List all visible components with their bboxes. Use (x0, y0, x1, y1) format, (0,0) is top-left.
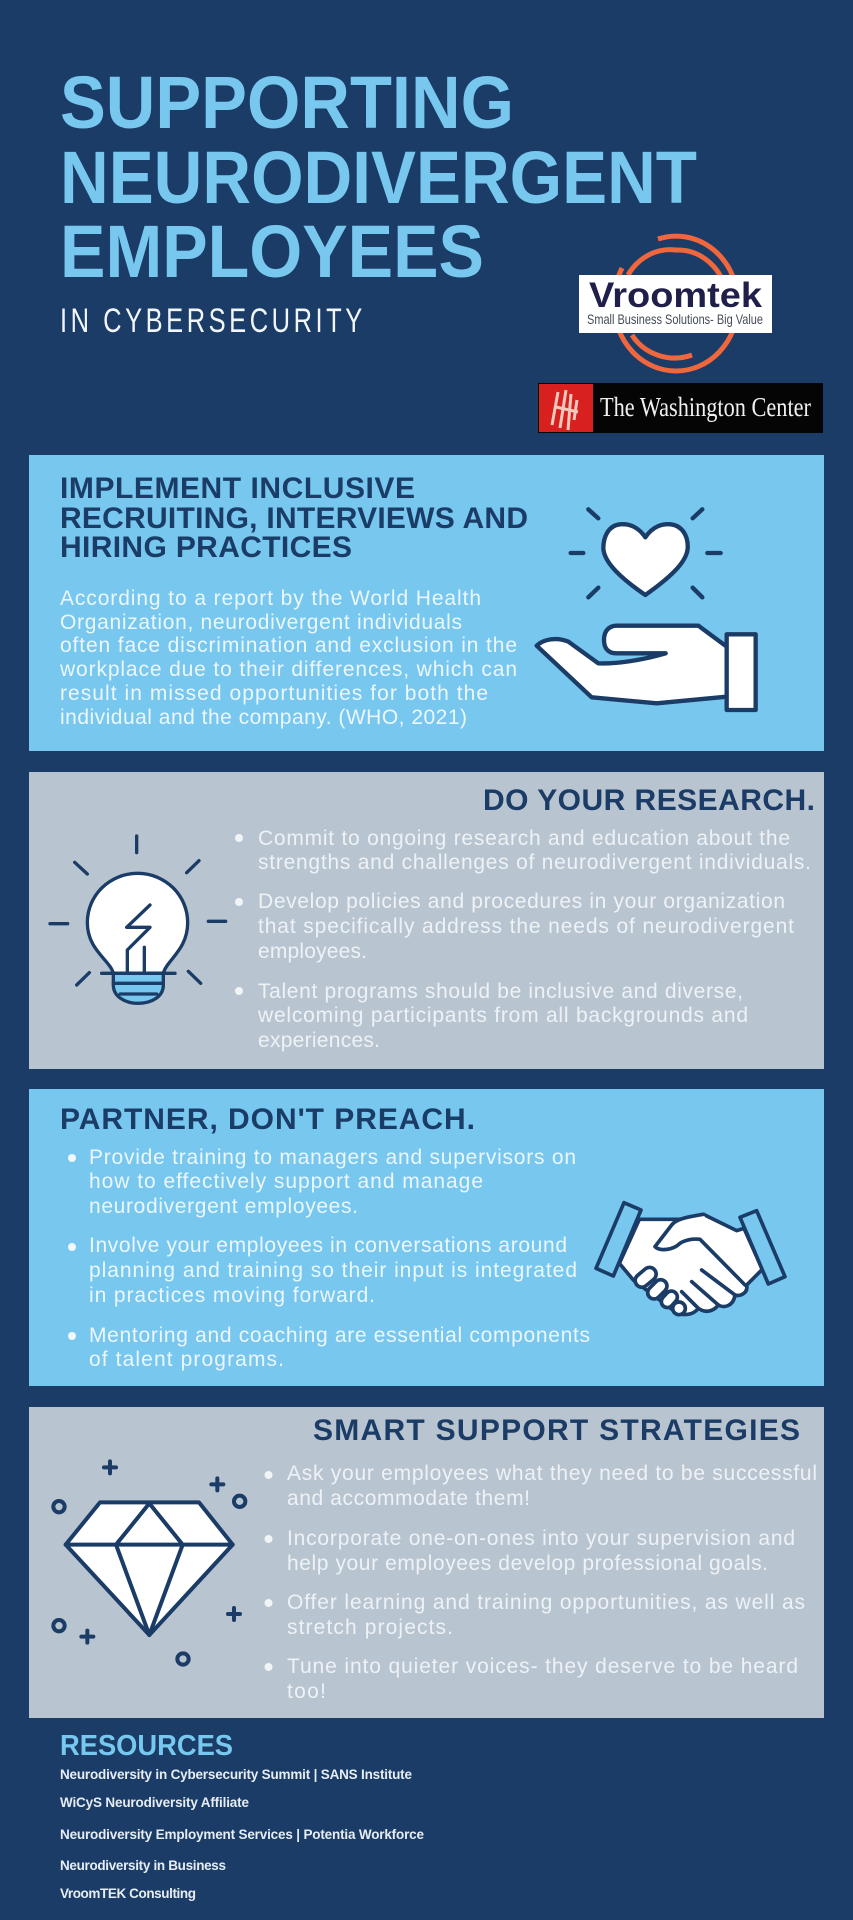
bullet list: partner: Mentoring and coaching are essential components (89, 1324, 590, 1347)
resources links: WiCyS Neurodiversity Affiliate (60, 1795, 249, 1810)
bullet list: partner: Involve your employees in conversations around (89, 1234, 567, 1257)
icon: light bulb (50, 836, 226, 1003)
bullet list: strategies: Incorporate one-on-ones into your supervision and (287, 1527, 795, 1550)
resources links: VroomTEK Consulting (60, 1886, 196, 1901)
bullet list: partner: in practices moving forward. (89, 1284, 375, 1307)
bullet list: partner: neurodivergent employees. (89, 1195, 358, 1218)
bullet list: research: Develop policies and procedures in your organization (258, 890, 785, 913)
bullet list: research: employees. (258, 940, 367, 963)
title line 3: EMPLOYEES (60, 210, 484, 293)
bullet list: strategies: Tune into quieter voices- they deserve to be heard (287, 1655, 798, 1678)
logo: Vroomtek (579, 236, 772, 371)
body text: WHO report (59, 587, 517, 729)
bullet list: research: welcoming participants from all backgrounds and (257, 1004, 748, 1027)
bullet list: partner: Provide training to managers and supervisors on (89, 1146, 576, 1169)
heading: do your research: DO YOUR RESEARCH. (483, 784, 815, 817)
bullet list: partner (68, 1146, 590, 1371)
resources links: Neurodiversity Employment Services | Potentia Workforce (60, 1827, 424, 1842)
heading: inclusive recruiting: HIRING PRACTICES (60, 531, 352, 564)
body text: WHO report: According to a report by the World Health (60, 587, 481, 610)
icon: diamond (53, 1461, 245, 1665)
bullet list: research (235, 827, 811, 1052)
bullet list: partner: of talent programs. (89, 1348, 284, 1371)
bullet list: research: experiences. (258, 1029, 380, 1052)
subtitle: IN CYBERSECURITY (60, 303, 362, 340)
logo: The Washington Center: The Washington Center (600, 392, 811, 422)
resources links: Neurodiversity in Business (60, 1858, 226, 1873)
panel: do your research (29, 772, 824, 1069)
title line 1: SUPPORTING (60, 61, 514, 144)
bullet list: research: that specifically address the needs of neurodivergent (258, 915, 794, 938)
bullet list: strategies: Offer learning and training opportunities, as well as (287, 1591, 805, 1614)
panel: smart support strategies (29, 1407, 824, 1718)
resources links (60, 1767, 424, 1901)
logo: The Washington Center (538, 383, 823, 433)
bullet list: strategies: stretch projects. (287, 1616, 453, 1639)
title line 2: NEURODIVERGENT (60, 136, 697, 219)
bullet list: research: Talent programs should be inclusive and diverse, (258, 980, 743, 1003)
bullet list: strategies: too! (287, 1680, 326, 1703)
bullet list: research: strengths and challenges of neurodivergent individuals. (258, 851, 811, 874)
body text: WHO report: Organization, neurodivergent individuals (60, 611, 462, 634)
heading: inclusive recruiting: IMPLEMENT INCLUSIVE (60, 472, 415, 505)
bullet list: partner: how to effectively support and manage (89, 1170, 483, 1193)
bullet list: strategies (264, 1462, 817, 1703)
body text: WHO report: often face discrimination and exclusion in the (60, 634, 517, 657)
heading: inclusive recruiting (60, 472, 528, 564)
icon: heart over open hand (537, 509, 756, 710)
panel: partner, don't preach (29, 1089, 824, 1386)
resources heading: RESOURCES (60, 1730, 233, 1762)
bullet list: research: Commit to ongoing research and education about the (258, 827, 790, 850)
title block (60, 61, 697, 340)
bullet list: partner: planning and training so their input is integrated (89, 1259, 577, 1282)
panel: inclusive recruiting (29, 455, 824, 751)
bullet list: strategies: Ask your employees what they need to be successful (287, 1462, 817, 1485)
heading: inclusive recruiting: RECRUITING, INTERVIEWS AND (60, 502, 528, 535)
bullet list: strategies: help your employees develop professional goals. (287, 1552, 768, 1575)
resources links: Neurodiversity in Cybersecurity Summit | SANS Institute (60, 1767, 412, 1782)
logo: Vroomtek: Small Business Solutions- Big Value (587, 311, 763, 327)
resources block (60, 1730, 424, 1901)
body text: WHO report: result in missed opportunities for both the (60, 682, 488, 705)
icon: handshake (596, 1203, 785, 1315)
bullet list: strategies: and accommodate them! (287, 1487, 530, 1510)
heading: smart support: SMART SUPPORT STRATEGIES (313, 1414, 800, 1447)
heading: partner: PARTNER, DON'T PREACH. (60, 1103, 475, 1136)
logo: Vroomtek: Vroomtek (589, 276, 763, 315)
body text: WHO report: individual and the company. (WHO, 2021) (60, 706, 467, 729)
body text: WHO report: workplace due to their differences, which can (59, 658, 517, 681)
